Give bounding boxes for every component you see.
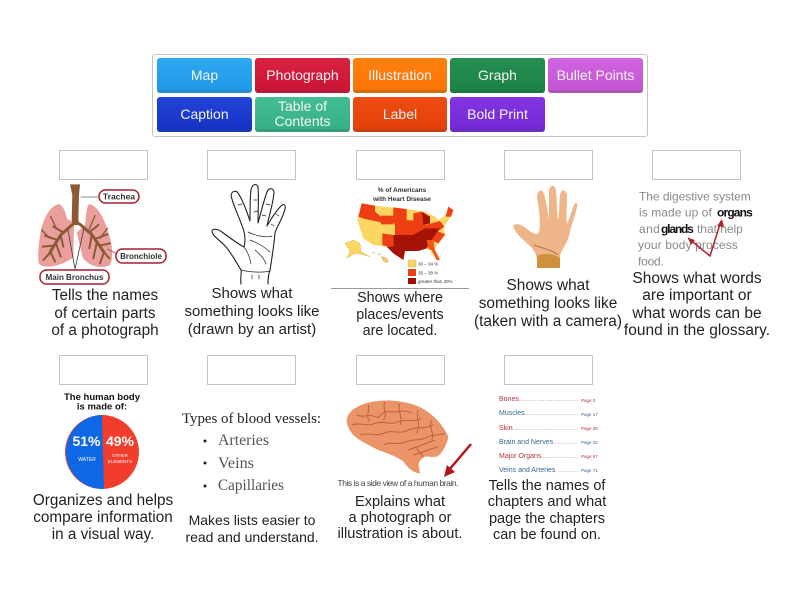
answer box row 2 col 1: [59, 355, 148, 385]
button: Illustration: Illustration: [368, 67, 432, 83]
image: heart disease map: % of Americans: [378, 187, 427, 194]
caption: caption: illustration is about.: [338, 526, 462, 542]
answer box row 1 col 4: [504, 150, 593, 180]
image: labelled lungs: Main Bronchus: [46, 273, 104, 282]
caption: bullet points: [185, 512, 319, 544]
caption: table of contents: chapters and what: [488, 494, 606, 510]
image: heart disease map: 30 – 34 %: [418, 262, 438, 266]
image: labelled lungs: Trachea: [103, 192, 135, 202]
image: table of contents sample: [499, 396, 598, 474]
image: bold print sample: [638, 190, 753, 268]
caption: bold print: what words can be: [632, 305, 762, 322]
image: bullet list: Capillaries: [218, 477, 284, 494]
caption: caption: a photograph or: [348, 510, 452, 526]
image: table of contents sample: Page 42: [581, 440, 598, 445]
image: bold print sample: that help: [697, 222, 743, 236]
button: Caption: [157, 97, 252, 132]
chart: pie graph: ELEMENTS: [108, 459, 132, 464]
image: bold print sample: food.: [638, 254, 664, 268]
image: table of contents sample: ......................: [543, 454, 578, 460]
image: table of contents sample: .........................................: [512, 426, 578, 432]
caption: table of contents: Tells the names of: [489, 478, 605, 494]
image: hand illustration: [212, 185, 285, 284]
caption: bold print: [624, 270, 770, 339]
caption: map: Shows where: [357, 290, 443, 306]
button: Graph: [450, 58, 545, 93]
chart: pie graph: 49%: [106, 433, 135, 449]
answer box row 1 col 2: [207, 150, 296, 180]
button: Illustration: [353, 58, 447, 93]
image: table of contents sample: ...............: [554, 440, 578, 446]
image: heart disease map: 35 – 39 %: [418, 270, 438, 276]
caption: label: of certain parts: [54, 304, 156, 322]
caption: illustration: (drawn by an artist): [188, 321, 316, 338]
image: heart disease map: [331, 187, 469, 289]
image: table of contents sample: Skin: [499, 425, 513, 432]
image: labelled lungs: [38, 184, 166, 284]
image: table of contents sample: Page 28: [581, 426, 598, 431]
caption: label: of a photograph: [51, 322, 159, 339]
caption: caption: Explains what: [355, 494, 445, 510]
image: brain with caption: [338, 400, 471, 488]
caption: bold print: Shows what words: [632, 270, 762, 287]
image: table of contents sample: Veins and Arteries: [499, 467, 556, 474]
image: heart disease map: greater than 30%: [418, 279, 453, 284]
image: bold print sample: The digestive system: [639, 190, 751, 204]
answer box row 1 col 5: [652, 150, 741, 180]
image: table of contents sample: Major Organs: [499, 453, 542, 460]
caption: map: places/events: [356, 306, 444, 322]
caption: table of contents: [488, 478, 606, 543]
button: Photograph: [255, 58, 350, 93]
image: brain with caption: This is a side view of a human brain.: [338, 478, 458, 488]
image: bullet list: Veins: [218, 455, 254, 472]
image: table of contents sample: .....................................: [519, 397, 578, 403]
caption: caption: [338, 494, 462, 542]
button: Table of Contents: [255, 97, 350, 132]
answer box row 2 col 4: [504, 355, 593, 385]
caption: photograph: (taken with a camera): [474, 313, 622, 330]
chart: pie graph: The human body: [64, 392, 141, 403]
button: Label: Label: [383, 106, 417, 122]
caption: graph: in a visual way.: [52, 526, 154, 543]
image: bullet list: [182, 411, 321, 494]
image: table of contents sample: Page 71: [581, 468, 598, 473]
image: table of contents sample: Muscles: [499, 410, 525, 417]
button: Map: Map: [191, 67, 218, 83]
panel: word bank: [152, 54, 648, 137]
button: Photograph: Photograph: [266, 67, 339, 83]
caption: photograph: [474, 277, 622, 330]
answer box row 1 col 1: [59, 150, 148, 180]
image: table of contents sample: Page 3: [581, 398, 596, 403]
button: Caption: Caption: [180, 106, 229, 122]
image: table of contents sample: Page 57: [581, 454, 598, 459]
image: bullet list: Arteries: [218, 432, 269, 449]
button: Bold Print: [450, 97, 545, 132]
caption: graph: compare information: [33, 509, 173, 526]
button: Bullet Points: [548, 58, 643, 93]
button: Table of Contents: Table of: [278, 98, 327, 114]
image: table of contents sample: .................................: [525, 411, 578, 417]
caption: bullet points: Makes lists easier to: [189, 512, 315, 528]
caption: bold print: found in the glossary.: [624, 322, 770, 339]
caption: photograph: Shows what: [507, 277, 589, 294]
caption: label: Tells the names: [52, 287, 158, 304]
answer box row 2 col 2: [207, 355, 296, 385]
caption: illustration: [184, 285, 320, 338]
image: hand photograph: [513, 186, 577, 268]
caption: map: are located.: [363, 323, 437, 339]
image: table of contents sample: ............: [558, 468, 578, 474]
caption: illustration: Shows what: [212, 285, 292, 302]
image: table of contents sample: Brain and Nerves: [499, 439, 554, 446]
image: heart disease map: with Heart Disease: [372, 196, 431, 203]
button: Label: [353, 97, 447, 132]
caption: map: [356, 290, 444, 339]
caption: table of contents: page the chapters: [489, 511, 605, 527]
caption: label: [51, 287, 159, 339]
button: Graph: Graph: [478, 67, 517, 83]
caption: graph: [33, 492, 173, 543]
image: table of contents sample: Bones: [499, 396, 519, 403]
chart: pie graph: 51%: [72, 433, 101, 449]
caption: illustration: something looks like: [184, 303, 320, 320]
button: Map: [157, 58, 252, 93]
image: bold print sample: is made up of: [639, 206, 712, 220]
answer box row 1 col 3: [356, 150, 445, 180]
button: Table of Contents: Contents: [274, 112, 331, 128]
image: bullet list: Types of blood vessels:: [182, 411, 321, 427]
chart: pie graph: WATER: [78, 457, 96, 463]
chart: pie graph: [64, 392, 141, 489]
caption: table of contents: can be found on.: [493, 527, 601, 543]
image: table of contents sample: Page 17: [581, 412, 598, 417]
caption: photograph: something looks like: [479, 295, 617, 312]
image: bold print sample: and: [639, 222, 660, 236]
answer box row 2 col 3: [356, 355, 445, 385]
caption: bullet points: read and understand.: [185, 528, 319, 544]
image: bold print sample: glands: [661, 222, 694, 236]
image: bold print sample: your body process: [638, 238, 738, 252]
caption: graph: Organizes and helps: [33, 492, 173, 509]
chart: pie graph: OTHER: [112, 453, 129, 458]
chart: pie graph: is made of:: [77, 402, 127, 412]
button: Bold Print: Bold Print: [467, 106, 528, 122]
image: labelled lungs: Bronchiole: [120, 252, 162, 261]
button: Bullet Points: Bullet Points: [557, 67, 634, 83]
image: bold print sample: organs: [717, 206, 753, 220]
caption: bold print: are important or: [642, 287, 752, 304]
